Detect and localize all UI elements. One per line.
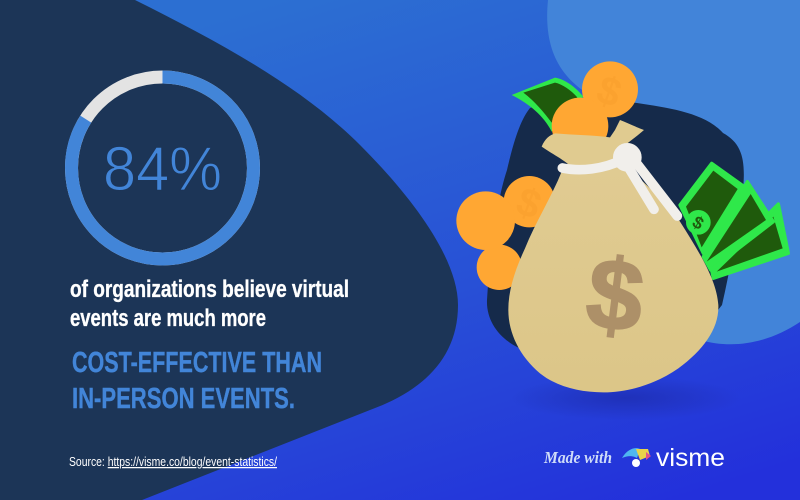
dark navy blob <box>487 100 744 352</box>
dollar sign: $ <box>581 236 650 354</box>
bag ruffle <box>542 120 644 170</box>
left coins: $ <box>511 179 547 228</box>
donut chart: 84% <box>72 77 254 259</box>
highlight text: COST-EFFECTIVE THAN <box>72 347 322 379</box>
top coins <box>552 61 638 154</box>
made with: Made with <box>543 448 612 467</box>
bag body <box>508 165 718 392</box>
source: Source: https://visme.co/blog/event-statistics/ <box>69 455 277 469</box>
top coins: $ <box>591 67 627 116</box>
highlight text <box>72 347 322 415</box>
illustration: money bag <box>456 61 788 392</box>
statement text <box>70 276 349 332</box>
left coins <box>456 176 555 290</box>
highlight text: IN-PERSON EVENTS. <box>72 383 295 415</box>
icon: visme logo <box>622 448 651 467</box>
statement text: of organizations believe virtual <box>70 276 349 303</box>
light blue blob <box>547 0 800 344</box>
right banknotes: $ <box>689 212 708 234</box>
bag shadow <box>510 376 740 420</box>
statement text: events are much more <box>70 305 266 332</box>
top banknote <box>512 78 583 132</box>
visme wordmark: visme <box>656 444 725 472</box>
made with visme logo <box>543 444 725 472</box>
panel: dark curved left panel <box>0 0 458 500</box>
chart value: 84% <box>103 135 222 204</box>
right banknotes <box>680 163 788 278</box>
rope <box>562 147 677 216</box>
